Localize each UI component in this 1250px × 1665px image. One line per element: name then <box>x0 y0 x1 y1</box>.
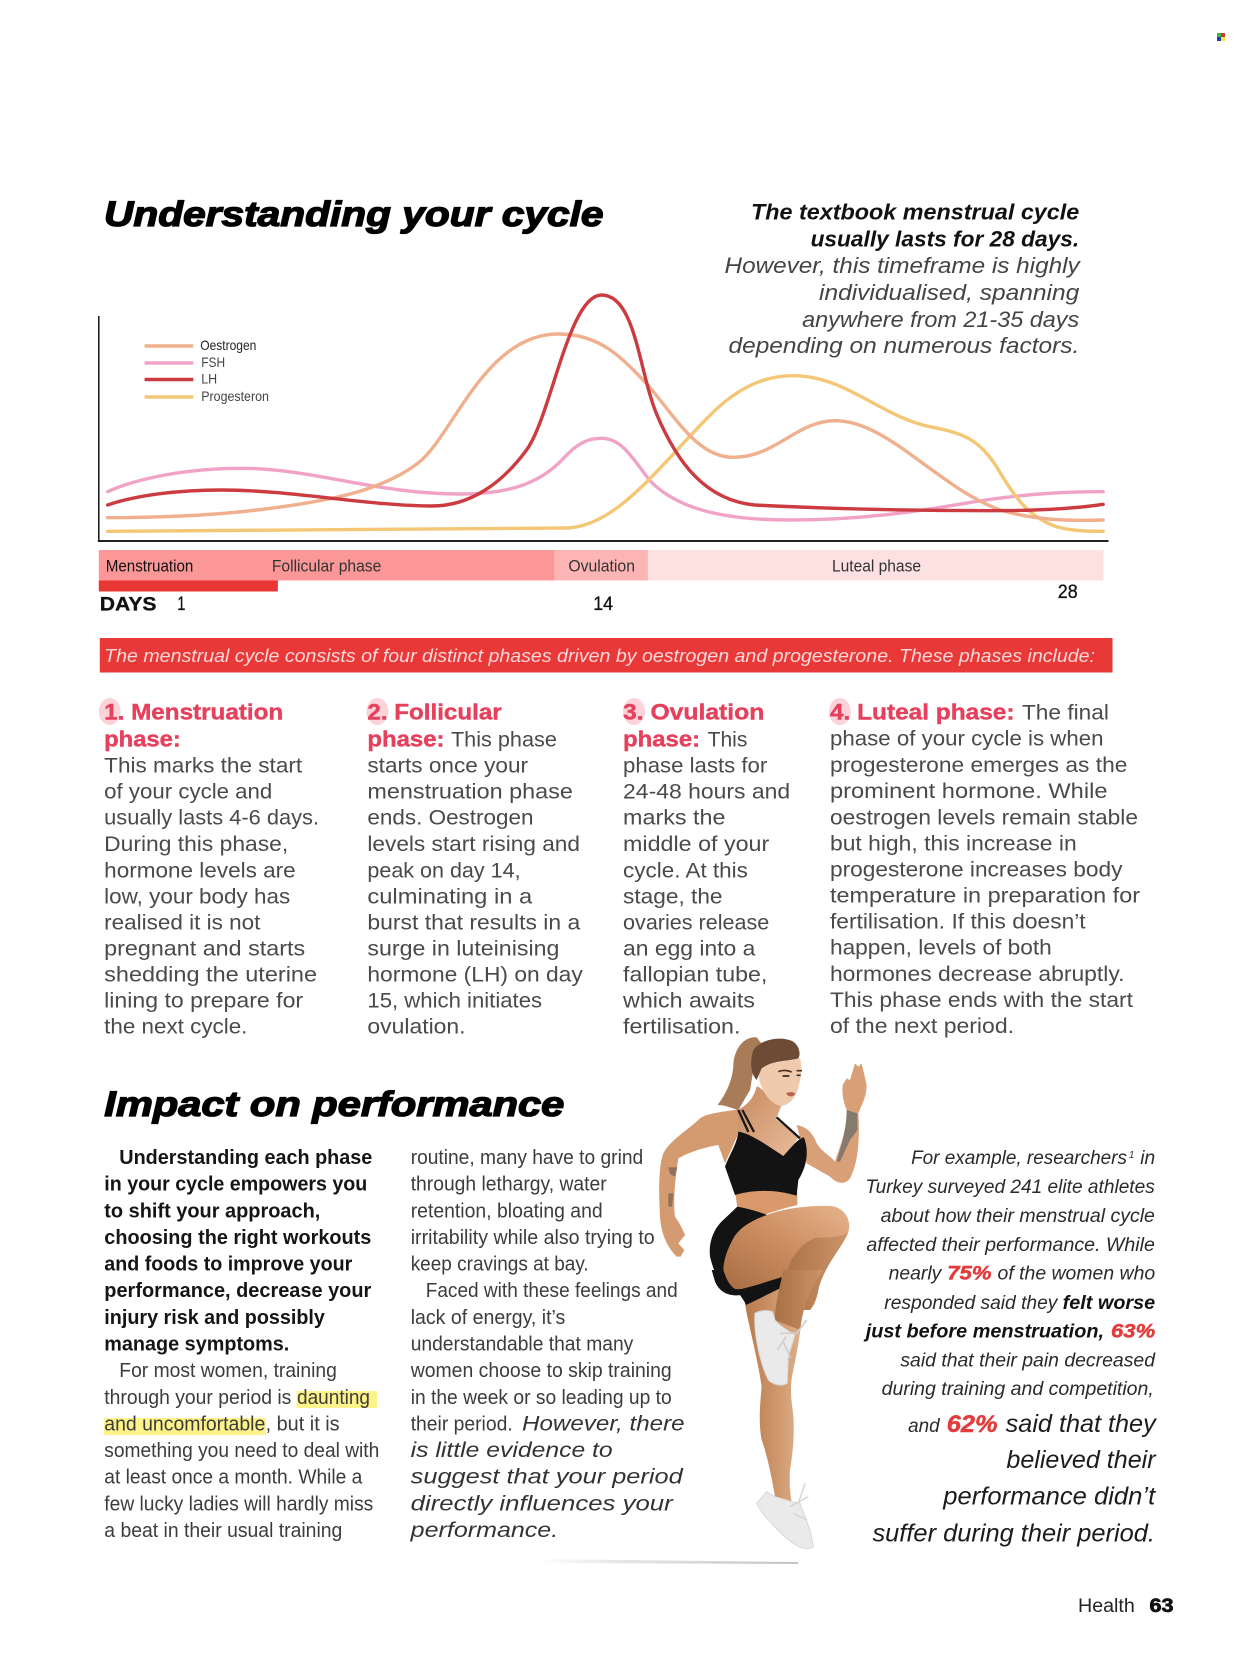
text column: left: Understanding each phase <box>119 1146 372 1169</box>
panel: phase 1 menstruation: 1. Menstruation <box>104 699 283 725</box>
text column: middle: through lethargy, water <box>411 1173 607 1196</box>
text column: middle: is little evidence to <box>411 1438 613 1462</box>
text column: right pull-out: said that they <box>1006 1411 1157 1438</box>
chart legend: FSH <box>201 355 225 370</box>
text column: right pull-out: felt worse <box>1063 1292 1155 1314</box>
panel: phase 3 ovulation: ovaries release <box>623 911 769 935</box>
intro text block: anywhere from 21-35 days <box>802 307 1079 332</box>
text column: left: For most women, training <box>119 1359 337 1382</box>
panel: phase 1 menstruation: low, your body has <box>104 885 290 909</box>
text column: middle: their period. <box>411 1412 513 1435</box>
text column: left: , but it is <box>266 1412 340 1435</box>
red banner: The menstrual cycle consists of four distinct phases driven by oestrogen and progesterone. These phases include: <box>104 645 1095 666</box>
panel: phase 1 menstruation <box>99 698 319 1039</box>
footer: section and page number: Health <box>1078 1596 1135 1617</box>
panel: phase 2 follicular: 15, which initiates <box>367 989 542 1013</box>
text column: left: to shift your approach, <box>104 1199 320 1222</box>
panel: phase 2 follicular: ends. Oestrogen <box>367 806 534 830</box>
panel: phase 4 luteal: 4. Luteal phase: <box>830 699 1015 725</box>
panel: phase 3 ovulation: marks the <box>623 806 726 830</box>
text column: left: injury risk and possibly <box>104 1306 325 1329</box>
panel: phase 2 follicular: surge in luteinising <box>367 937 559 961</box>
text column: right pull-out: 62% <box>947 1411 998 1438</box>
intro text block: usually lasts for 28 days. <box>811 226 1079 252</box>
text column: left: and foods to improve your <box>104 1253 352 1276</box>
text column: middle: routine, many have to grind <box>411 1146 643 1169</box>
text column: right pull-out: affected their performance. While <box>866 1234 1155 1256</box>
panel: phase 3 ovulation: middle of your <box>623 833 769 856</box>
text column: left: choosing the right workouts <box>104 1226 371 1249</box>
panel: phase 1 menstruation: phase: <box>104 726 181 752</box>
panel: phase 4 luteal: fertilisation. If this doesn’t <box>830 910 1086 934</box>
text column: middle: retention, bloating and <box>411 1199 603 1222</box>
icon: colour registration mark <box>1217 33 1225 41</box>
panel: phase 4 luteal: phase of your cycle is when <box>830 727 1104 751</box>
panel: phase 1 menstruation: During this phase, <box>104 833 288 856</box>
text column: right pull-out: about how their menstrual cycle <box>881 1205 1155 1227</box>
text column: middle: suggest that your period <box>411 1465 684 1489</box>
panel: phase 4 luteal: oestrogen levels remain stable <box>830 806 1138 830</box>
panel: phase 2 follicular: levels start rising and <box>367 833 580 856</box>
panel: phase 4 luteal: This phase ends with the start <box>830 989 1133 1012</box>
intro text block: depending on numerous factors. <box>729 333 1079 358</box>
panel: phase 2 follicular: This phase <box>451 728 557 752</box>
panel: phase 1 menstruation: lining to prepare for <box>104 989 303 1013</box>
day axis labels <box>100 582 1078 616</box>
phase timeline bar: Ovulation <box>568 557 635 576</box>
panel: phase 3 ovulation: fertilisation. <box>623 1015 740 1039</box>
heading: Impact on performance: Impact on performance <box>104 1085 564 1124</box>
panel: phase 1 menstruation: pregnant and starts <box>104 937 305 961</box>
phase timeline bar: Menstruation <box>106 557 193 576</box>
panel: phase 2 follicular: culminating in a <box>367 885 533 909</box>
panel: phase 4 luteal: progesterone increases body <box>830 858 1123 882</box>
text column: left <box>104 1146 379 1542</box>
panel: phase 4 luteal <box>829 698 1140 1038</box>
text column: right pull-out: 63% <box>1111 1321 1156 1343</box>
text column: left: and uncomfortable <box>104 1412 265 1435</box>
chart legend: Progesteron <box>201 389 269 404</box>
text column: middle: irritability while also trying to <box>411 1226 655 1249</box>
phase timeline bar: Luteal phase <box>832 557 921 576</box>
panel: phase 1 menstruation: realised it is not <box>104 911 261 935</box>
day axis labels: 28 <box>1058 582 1078 603</box>
chart legend: Oestrogen <box>200 338 256 353</box>
text column: right pull-out: of the women who <box>998 1263 1155 1285</box>
text column: middle: directly influences your <box>411 1491 674 1515</box>
text column: right pull-out: and <box>908 1415 941 1437</box>
panel: phase 3 ovulation: This <box>708 728 747 752</box>
panel: phase 3 ovulation: phase: <box>623 726 700 752</box>
text column: right pull-out: performance didn’t <box>942 1484 1156 1511</box>
panel: phase 4 luteal: The final <box>1022 701 1109 725</box>
panel: phase 1 menstruation: the next cycle. <box>104 1015 247 1039</box>
text column: left: few lucky ladies will hardly miss <box>104 1492 373 1515</box>
text column: left: at least once a month. While a <box>104 1466 363 1489</box>
footer: section and page number <box>1078 1596 1174 1617</box>
text column: middle: understandable that many <box>411 1332 634 1356</box>
panel: phase 3 ovulation: which awaits <box>622 989 755 1013</box>
text column: right pull-out: believed their <box>1006 1447 1157 1474</box>
panel: phase 2 follicular: phase: <box>367 726 444 752</box>
intro text block <box>725 199 1082 358</box>
title: Understanding your cycle: Understanding your cycle <box>104 195 604 234</box>
panel: phase 2 follicular: peak on day 14, <box>367 859 521 883</box>
text column: left: daunting <box>297 1386 370 1409</box>
panel: phase 1 menstruation: shedding the uterine <box>104 963 317 987</box>
text column: right pull-out: suffer during their period. <box>872 1520 1155 1547</box>
text column: middle: Faced with these feelings and <box>426 1279 678 1302</box>
panel: phase 3 ovulation: an egg into a <box>623 937 756 961</box>
line chart: hormone levels <box>98 295 1109 541</box>
panel: phase 3 ovulation <box>622 698 790 1039</box>
panel: phase 4 luteal: hormones decrease abruptly. <box>830 963 1124 986</box>
panel: phase 1 menstruation: hormone levels are <box>104 859 296 883</box>
text column: right pull-out: in <box>1140 1147 1155 1169</box>
panel: phase 4 luteal: progesterone emerges as the <box>830 754 1127 777</box>
text column: middle: women choose to skip training <box>410 1359 672 1382</box>
day axis labels: 14 <box>593 594 613 615</box>
text column: right pull-out: said that their pain decreased <box>900 1349 1156 1371</box>
day axis labels: 1 <box>177 594 185 615</box>
panel: phase 4 luteal: prominent hormone. While <box>830 780 1108 803</box>
panel: phase 3 ovulation: cycle. At this <box>623 859 748 883</box>
panel: phase 4 luteal: but high, this increase in <box>830 832 1077 856</box>
text column: middle: keep cravings at bay. <box>411 1253 589 1276</box>
text column: right pull-out: nearly <box>889 1263 942 1285</box>
chart legend: LH <box>201 371 217 387</box>
panel: phase 3 ovulation: phase lasts for <box>623 754 767 778</box>
panel: phase 2 follicular: hormone (LH) on day <box>367 963 583 987</box>
panel: phase 2 follicular <box>366 698 583 1039</box>
text column: middle: lack of energy, it’s <box>411 1306 565 1329</box>
day axis labels: DAYS <box>100 594 156 616</box>
text column: left: manage symptoms. <box>104 1332 289 1356</box>
phase timeline bar <box>99 550 1104 592</box>
text column: left: a beat in their usual training <box>104 1519 342 1542</box>
text column: right pull-out: Turkey surveyed 241 elite athletes <box>865 1176 1155 1198</box>
text column: right pull-out: 75% <box>947 1263 992 1285</box>
text column: left: something you need to deal with <box>104 1439 379 1462</box>
text column: right pull-out <box>863 1147 1157 1547</box>
text column: middle: performance. <box>410 1518 558 1542</box>
panel: phase 2 follicular: ovulation. <box>367 1015 466 1039</box>
text column: middle: However, there <box>522 1411 685 1435</box>
text column: right pull-out: responded said they <box>884 1292 1058 1314</box>
panel: phase 2 follicular: starts once your <box>367 754 528 778</box>
text column: right pull-out: during training and competition, <box>882 1378 1154 1400</box>
panel: phase 4 luteal: temperature in preparation for <box>830 884 1140 908</box>
illustration: athlete jumping with knee raised <box>540 1037 867 1564</box>
intro text block: The textbook menstrual cycle <box>751 199 1079 225</box>
panel: phase 3 ovulation: 24-48 hours and <box>623 780 790 804</box>
panel: phase 3 ovulation: stage, the <box>623 885 723 909</box>
panel: phase 4 luteal: of the next period. <box>830 1015 1014 1038</box>
panel: phase 1 menstruation: of your cycle and <box>104 780 272 804</box>
footer: section and page number: 63 <box>1150 1596 1174 1617</box>
phase timeline bar: Follicular phase <box>272 557 381 576</box>
text column: middle <box>410 1146 685 1542</box>
panel: phase 2 follicular: 2. Follicular <box>367 699 502 725</box>
panel: phase 2 follicular: burst that results in a <box>367 911 581 935</box>
panel: phase 3 ovulation: 3. Ovulation <box>623 699 764 725</box>
text column: middle: in the week or so leading up to <box>411 1386 672 1409</box>
intro text block: individualised, spanning <box>819 280 1079 305</box>
red banner <box>100 638 1112 672</box>
text column: right pull-out: 1 <box>1129 1150 1134 1161</box>
text column: left: performance, decrease your <box>104 1279 371 1302</box>
panel: phase 1 menstruation: usually lasts 4-6 days. <box>104 806 319 830</box>
intro text block: However, this timeframe is highly <box>725 253 1082 278</box>
chart legend <box>145 338 269 404</box>
text column: right pull-out: For example, researchers <box>911 1147 1127 1169</box>
text column: left: in your cycle empowers you <box>104 1173 367 1196</box>
panel: phase 4 luteal: happen, levels of both <box>830 936 1052 960</box>
text column: right pull-out: just before menstruation, <box>863 1321 1104 1343</box>
text column: left: through your period is <box>104 1386 291 1409</box>
panel: phase 3 ovulation: fallopian tube, <box>623 963 767 987</box>
panel: phase 2 follicular: menstruation phase <box>367 780 573 804</box>
panel: phase 1 menstruation: This marks the start <box>104 754 302 778</box>
